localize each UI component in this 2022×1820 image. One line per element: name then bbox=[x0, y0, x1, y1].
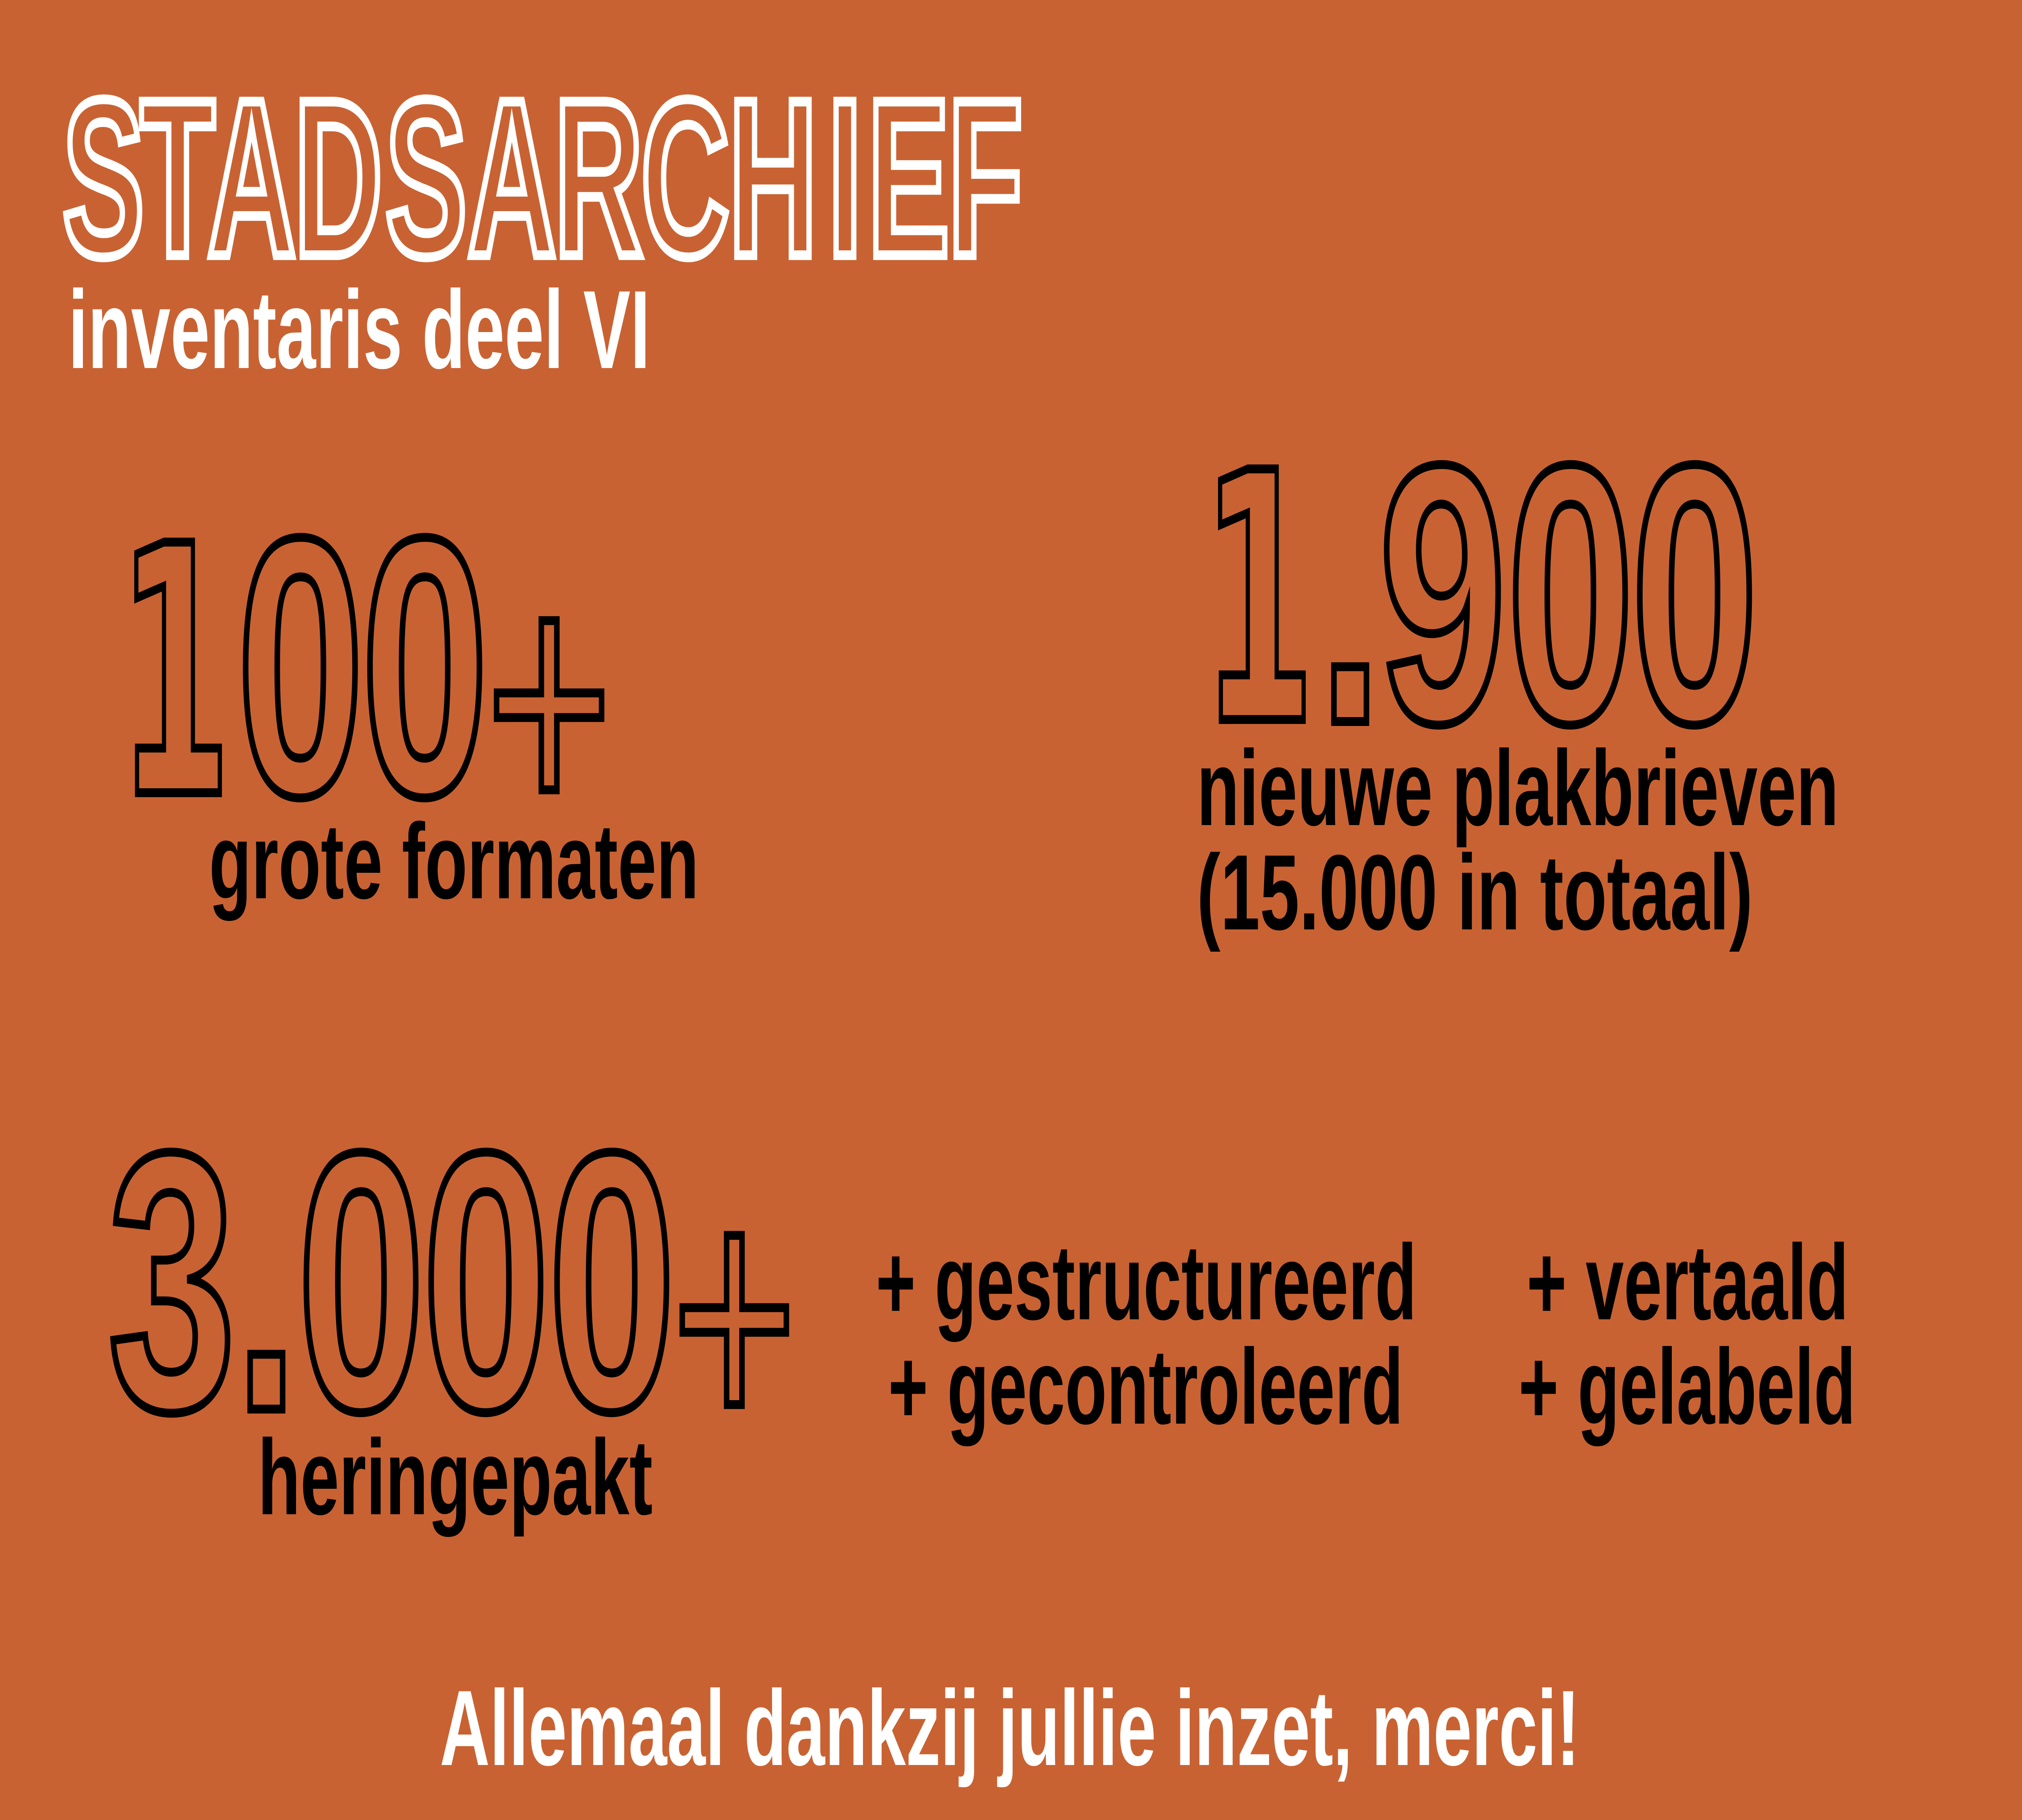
stat: 100+ grote formaten bbox=[118, 461, 699, 921]
checklist left column bbox=[876, 1222, 1417, 1446]
stat: 3.000+ heringepakt bbox=[108, 1076, 797, 1537]
number 100+ bbox=[118, 461, 612, 894]
number 1.900: 1 bbox=[1202, 401, 1315, 801]
item: vertaald: + vertaald bbox=[1527, 1222, 1849, 1342]
number 3.000+: 3.000 bbox=[108, 1076, 676, 1487]
subtitle: inventaris deel VI bbox=[68, 267, 650, 392]
checklist right column bbox=[1519, 1222, 1856, 1446]
header block bbox=[63, 54, 1023, 392]
number 100+: + bbox=[486, 508, 612, 894]
label: grote formaten bbox=[209, 801, 699, 921]
label line 2: (15.000 in totaal) bbox=[1197, 832, 1753, 952]
label line 1: nieuwe plakbrieven bbox=[1197, 728, 1839, 848]
item: gelabeld: + gelabeld bbox=[1519, 1327, 1856, 1446]
number 100+: 1 bbox=[118, 474, 231, 874]
title: outlined STADSARCHIEF: STADSARCHIEF bbox=[63, 54, 1023, 303]
number 3.000+: + bbox=[672, 1123, 797, 1509]
closing thank-you message: Allemaal dankzij jullie inzet, merci! bbox=[440, 1668, 1580, 1788]
label: heringepakt bbox=[258, 1417, 653, 1537]
item: gestructureerd: + gestructureerd bbox=[876, 1222, 1417, 1342]
stat: 1.900 nieuwe plakbrieven bbox=[1197, 388, 1839, 952]
number 100+: 00 bbox=[237, 461, 489, 872]
number 1.900: .900 bbox=[1318, 388, 1759, 800]
item: gecontroleerd: + gecontroleerd bbox=[888, 1327, 1403, 1446]
